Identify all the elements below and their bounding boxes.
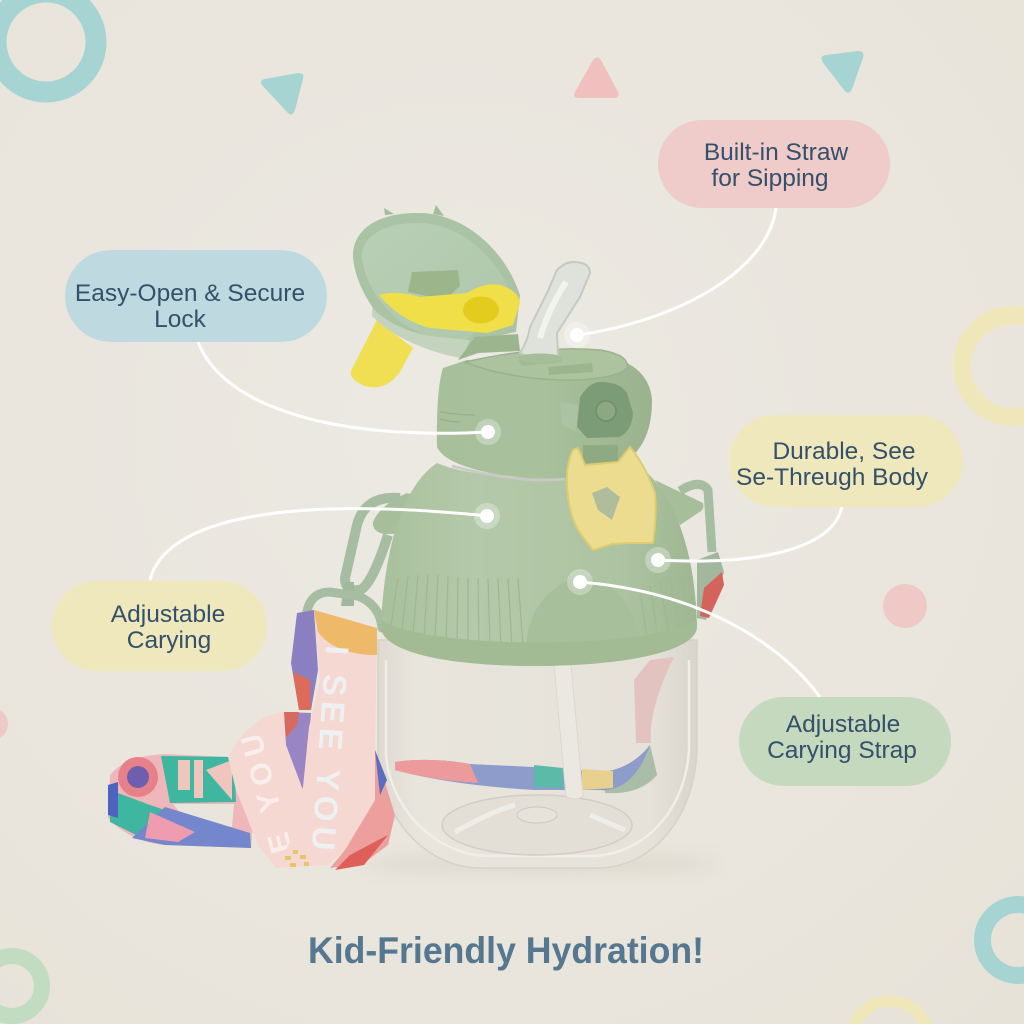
folded strap front section — [228, 712, 303, 868]
main hanging strap front section — [276, 610, 377, 868]
callout: carrying strap: Adjustable — [786, 711, 900, 738]
callout: durable body: Se-Threugh Body — [736, 464, 929, 491]
callout: carrying strap: Carying Strap — [767, 737, 917, 764]
callout: durable body: Durable, See — [772, 438, 916, 465]
transparent cup — [378, 640, 697, 868]
water bottle illustration — [108, 205, 724, 870]
green dome body — [381, 463, 697, 666]
callout: built-in straw: Built-in Straw — [704, 139, 848, 166]
rear folded strap section — [283, 712, 395, 870]
yellow silicone plug on the cap — [567, 445, 656, 550]
yellow mouthpiece — [379, 284, 520, 333]
callout: easy-open lock: Easy-Open & Secure — [75, 280, 305, 307]
strap inside the cup — [395, 657, 674, 793]
callout: built-in straw: for Sipping — [711, 165, 829, 192]
trailing strap loop on the left — [108, 754, 255, 848]
left lug and carabiner clip — [306, 493, 432, 632]
folded strap front section: E YOU — [235, 730, 299, 857]
open flip lid — [351, 205, 520, 387]
strap opening — [173, 804, 234, 827]
title: Kid-Friendly Hydration! — [308, 930, 704, 971]
callout: body point — [52, 503, 500, 671]
upper back strap section — [291, 610, 318, 710]
callout: durable body — [645, 415, 963, 573]
floor shadow — [360, 853, 720, 875]
clear straw tip — [518, 262, 590, 362]
pivot button — [577, 382, 633, 438]
green screw cap — [437, 349, 652, 480]
callout: body point: Carying — [127, 627, 211, 654]
callout: easy-open lock — [65, 250, 501, 445]
callout: body point: Adjustable — [111, 601, 225, 628]
right lug and clip — [655, 480, 724, 620]
callout: carrying strap — [567, 569, 951, 786]
callout: easy-open lock: Lock — [154, 306, 207, 333]
callout: built-in straw — [564, 120, 890, 348]
lid fold-down plug — [351, 320, 413, 387]
straw inside the cup — [554, 665, 583, 799]
main hanging strap front section: I SEE YOU — [305, 645, 356, 852]
